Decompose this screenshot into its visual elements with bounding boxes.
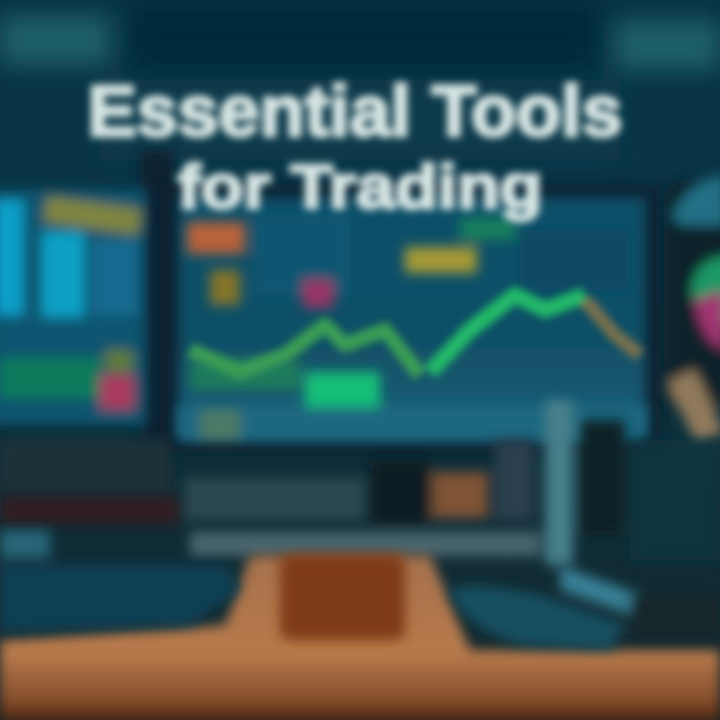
line chart [190, 295, 640, 375]
mouse pad and phone [450, 565, 720, 650]
center monitor [160, 185, 660, 453]
desk [0, 555, 720, 720]
right monitor with pie chart [664, 175, 720, 445]
title: for Trading [178, 153, 542, 222]
keyboard [0, 530, 240, 632]
coffee mug [280, 555, 405, 640]
title [88, 72, 622, 222]
lower equipment [0, 400, 720, 565]
left monitor [0, 150, 174, 440]
title: Essential Tools [88, 72, 622, 152]
center screen blobs [178, 215, 646, 441]
left monitor bars [0, 196, 141, 409]
